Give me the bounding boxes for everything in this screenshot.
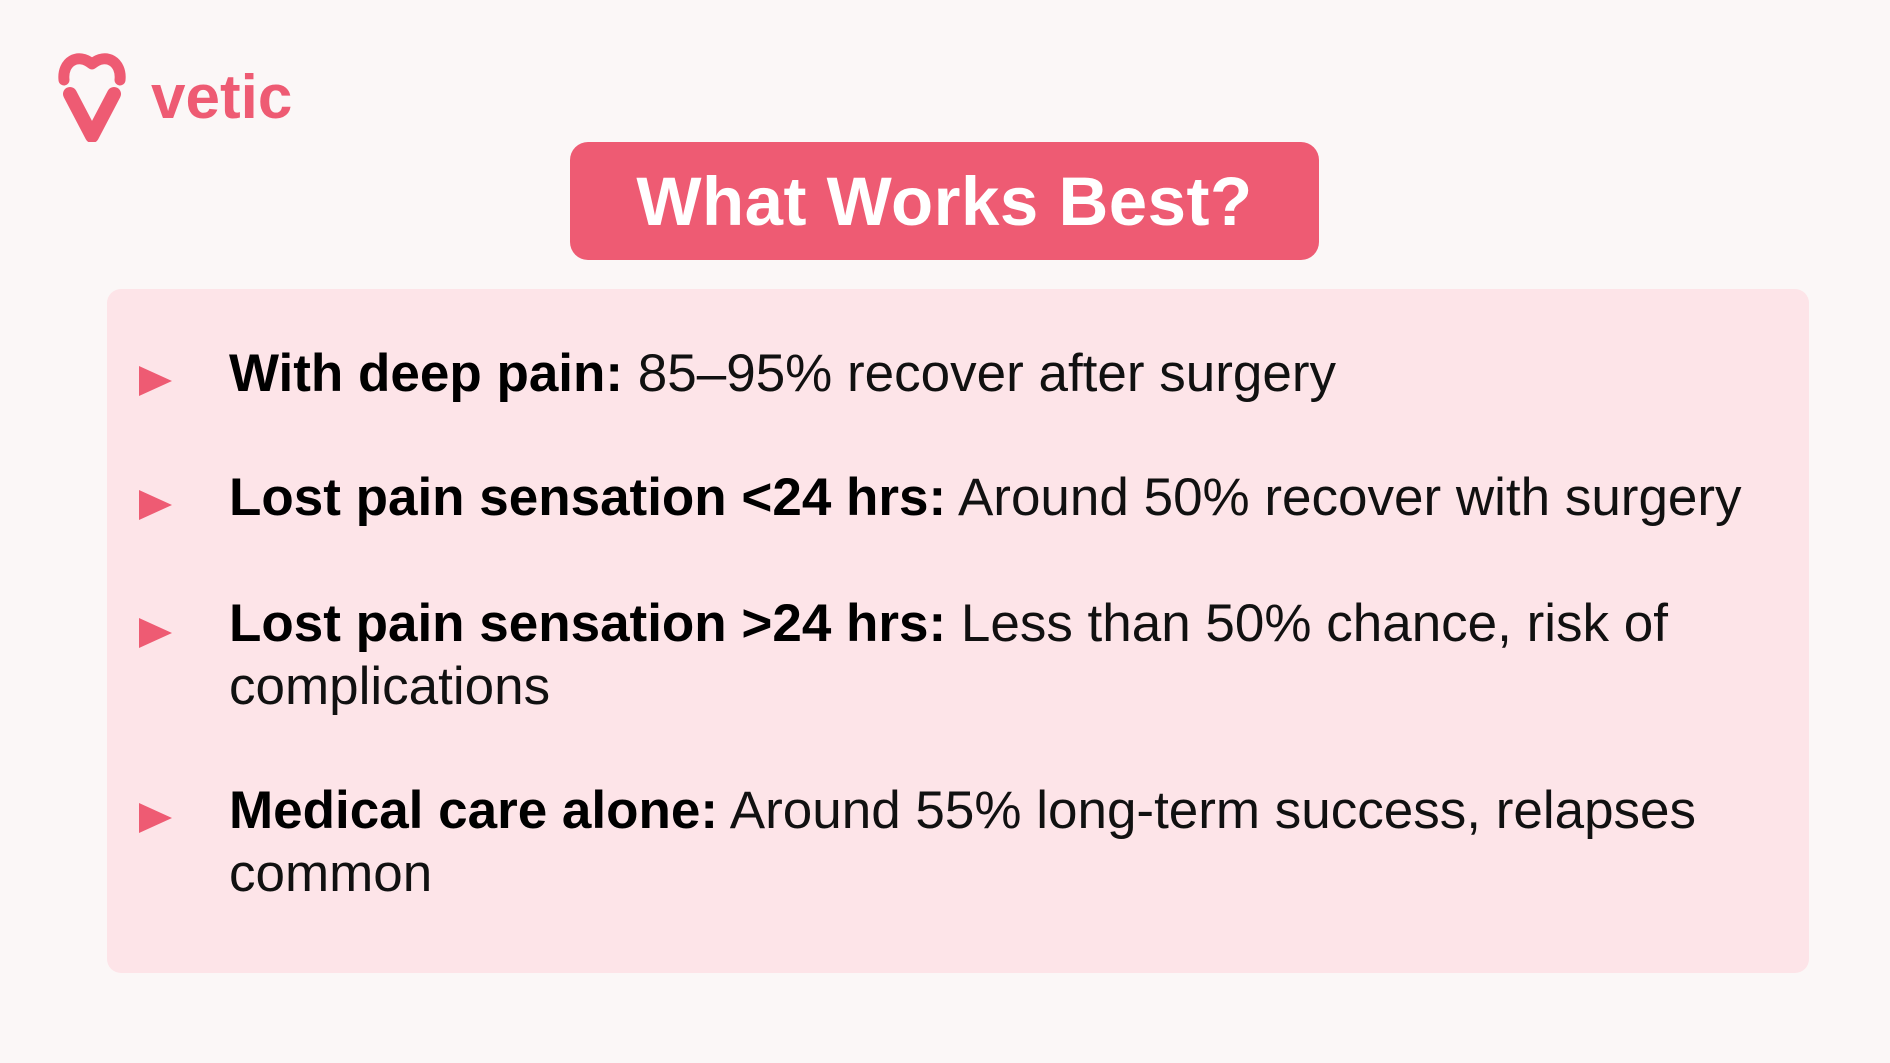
- logo: [58, 53, 292, 142]
- item: lost pain >24: complications: [229, 657, 550, 716]
- icon: heart V: [64, 59, 120, 136]
- item: lost pain <24: Lost pain sensation <24 hrs: Around 50% recover with surgery: [229, 468, 1742, 527]
- item: medical care: common: [229, 844, 432, 903]
- item: medical care: Medical care alone: Around 55% long-term success, relapses: [229, 781, 1696, 840]
- title: What Works Best?: [636, 163, 1253, 240]
- title: [570, 142, 1319, 260]
- item: lost pain >24: [139, 594, 1668, 716]
- item: deep pain: With deep pain: 85–95% recover after surgery: [229, 344, 1336, 403]
- item: lost pain >24: Lost pain sensation >24 hrs: Less than 50% chance, risk of: [229, 594, 1668, 653]
- brand name: vetic: [151, 63, 292, 132]
- panel: outcomes list: [107, 289, 1809, 973]
- item: medical care: [139, 781, 1696, 903]
